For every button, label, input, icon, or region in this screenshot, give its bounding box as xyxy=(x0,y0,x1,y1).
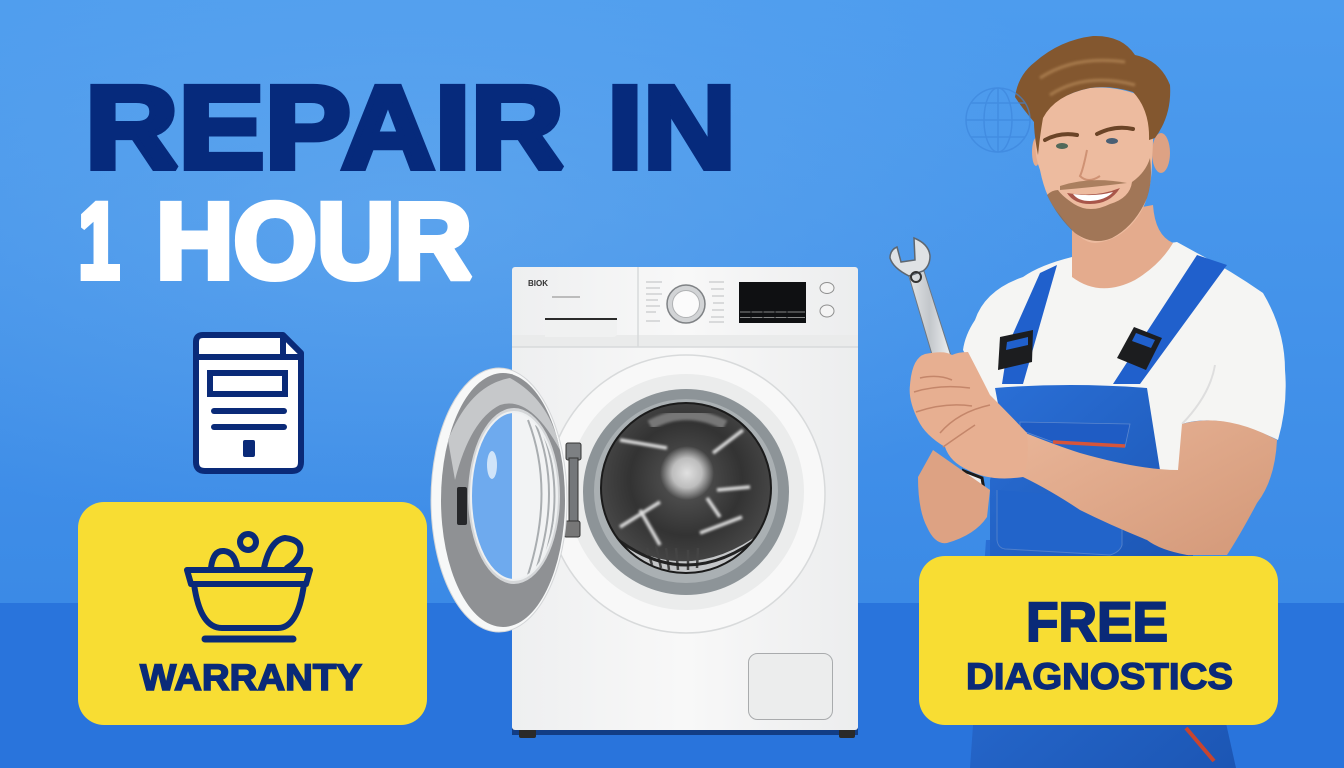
hinge xyxy=(564,443,581,537)
red tool strap xyxy=(1186,728,1214,761)
diagnostics label: DIAGNOSTICS xyxy=(966,656,1233,697)
left forearm xyxy=(918,450,990,543)
straps xyxy=(1002,255,1227,384)
face xyxy=(1045,128,1133,204)
neck xyxy=(1072,205,1173,288)
buckles xyxy=(998,327,1162,370)
program dial xyxy=(667,285,705,323)
technician xyxy=(890,36,1286,768)
icon: bowl xyxy=(187,534,310,639)
right arm xyxy=(1023,420,1277,555)
beard xyxy=(1047,158,1151,241)
program labels xyxy=(646,282,724,322)
wrench xyxy=(890,238,984,495)
buttons xyxy=(820,282,834,317)
ears xyxy=(1152,133,1170,173)
overalls lower xyxy=(970,540,1236,768)
washer feet xyxy=(519,729,855,738)
washer shadow xyxy=(512,728,858,735)
free label: FREE xyxy=(1026,590,1168,653)
panel: warranty xyxy=(78,502,427,725)
background xyxy=(0,0,1344,603)
title: 1 hour: HOUR xyxy=(156,180,472,301)
hands xyxy=(910,352,1028,478)
lower pocket xyxy=(997,490,1122,555)
washer body xyxy=(512,267,858,730)
warranty label: WARRANTY xyxy=(140,657,362,698)
bib pocket xyxy=(1020,422,1130,447)
service hatch xyxy=(748,654,832,720)
title: repair in xyxy=(85,62,736,194)
overall bib xyxy=(990,385,1188,556)
hair xyxy=(1015,36,1170,155)
drum xyxy=(600,403,771,580)
head xyxy=(1035,88,1153,243)
detergent drawer xyxy=(545,318,617,337)
title: repair in: IN xyxy=(607,62,736,194)
brand label: BIOK xyxy=(528,279,548,288)
panel: free diagnostics xyxy=(919,556,1278,725)
door xyxy=(431,368,567,632)
title: 1 hour: 1 xyxy=(78,180,120,301)
icon: faint globe xyxy=(966,88,1030,152)
floor band xyxy=(0,603,1344,768)
drum ring xyxy=(547,355,825,633)
display xyxy=(739,282,806,323)
t-shirt xyxy=(963,242,1286,470)
washing machine xyxy=(431,267,858,738)
title: repair in: REPAIR xyxy=(85,62,564,194)
icon: document xyxy=(196,335,301,471)
door glass xyxy=(472,413,556,579)
